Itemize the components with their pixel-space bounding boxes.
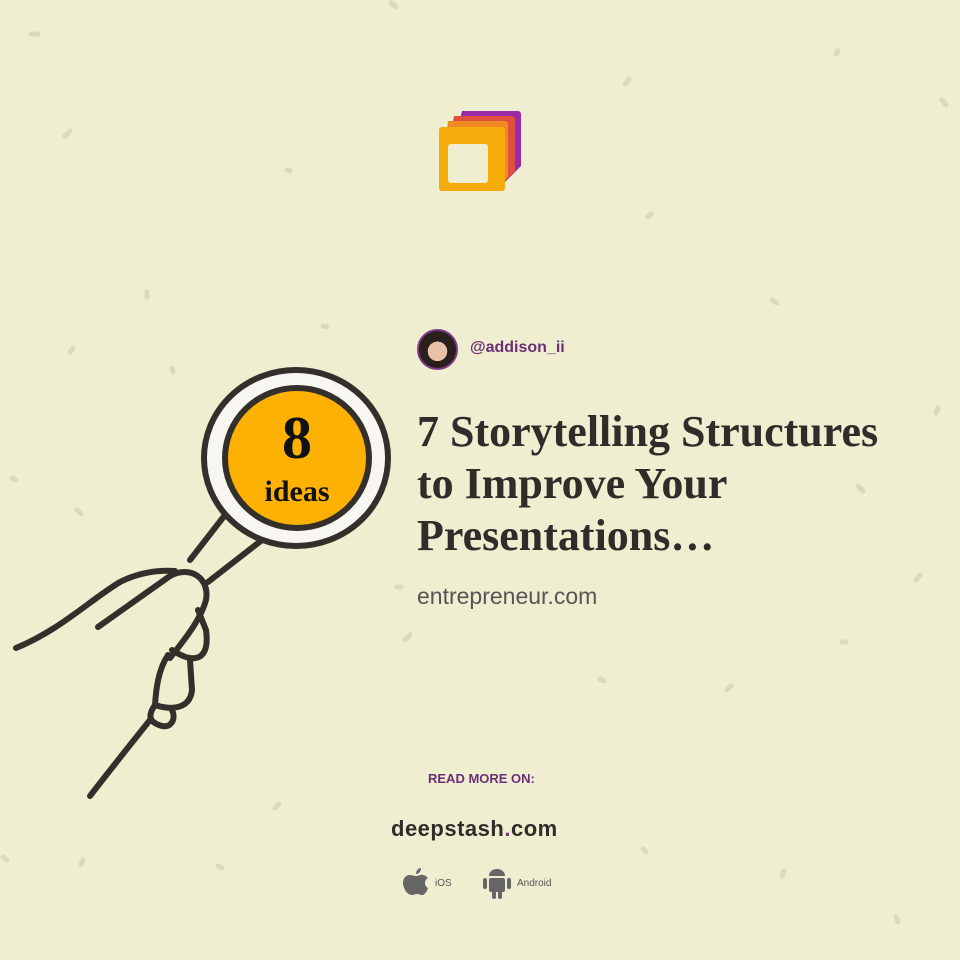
logo icon (439, 111, 521, 191)
magnifier with hand (13, 367, 391, 799)
app icons (403, 868, 551, 899)
read more: READ MORE ON: (428, 771, 535, 786)
icon: android (483, 869, 511, 899)
magnifier with hand: 8 (282, 405, 312, 471)
app icons: iOS (435, 878, 452, 889)
author (417, 329, 565, 370)
avatar (417, 329, 458, 370)
icon: apple (403, 868, 428, 895)
deepstash brand: deepstash.com (391, 816, 558, 841)
magnifier with hand: ideas (264, 475, 330, 508)
title: 7 Storytelling Structures to Improve Your Presentations… (417, 407, 878, 560)
source: entrepreneur.com (417, 583, 597, 609)
handle: @addison_ii (470, 339, 565, 356)
app icons: Android (517, 878, 551, 889)
